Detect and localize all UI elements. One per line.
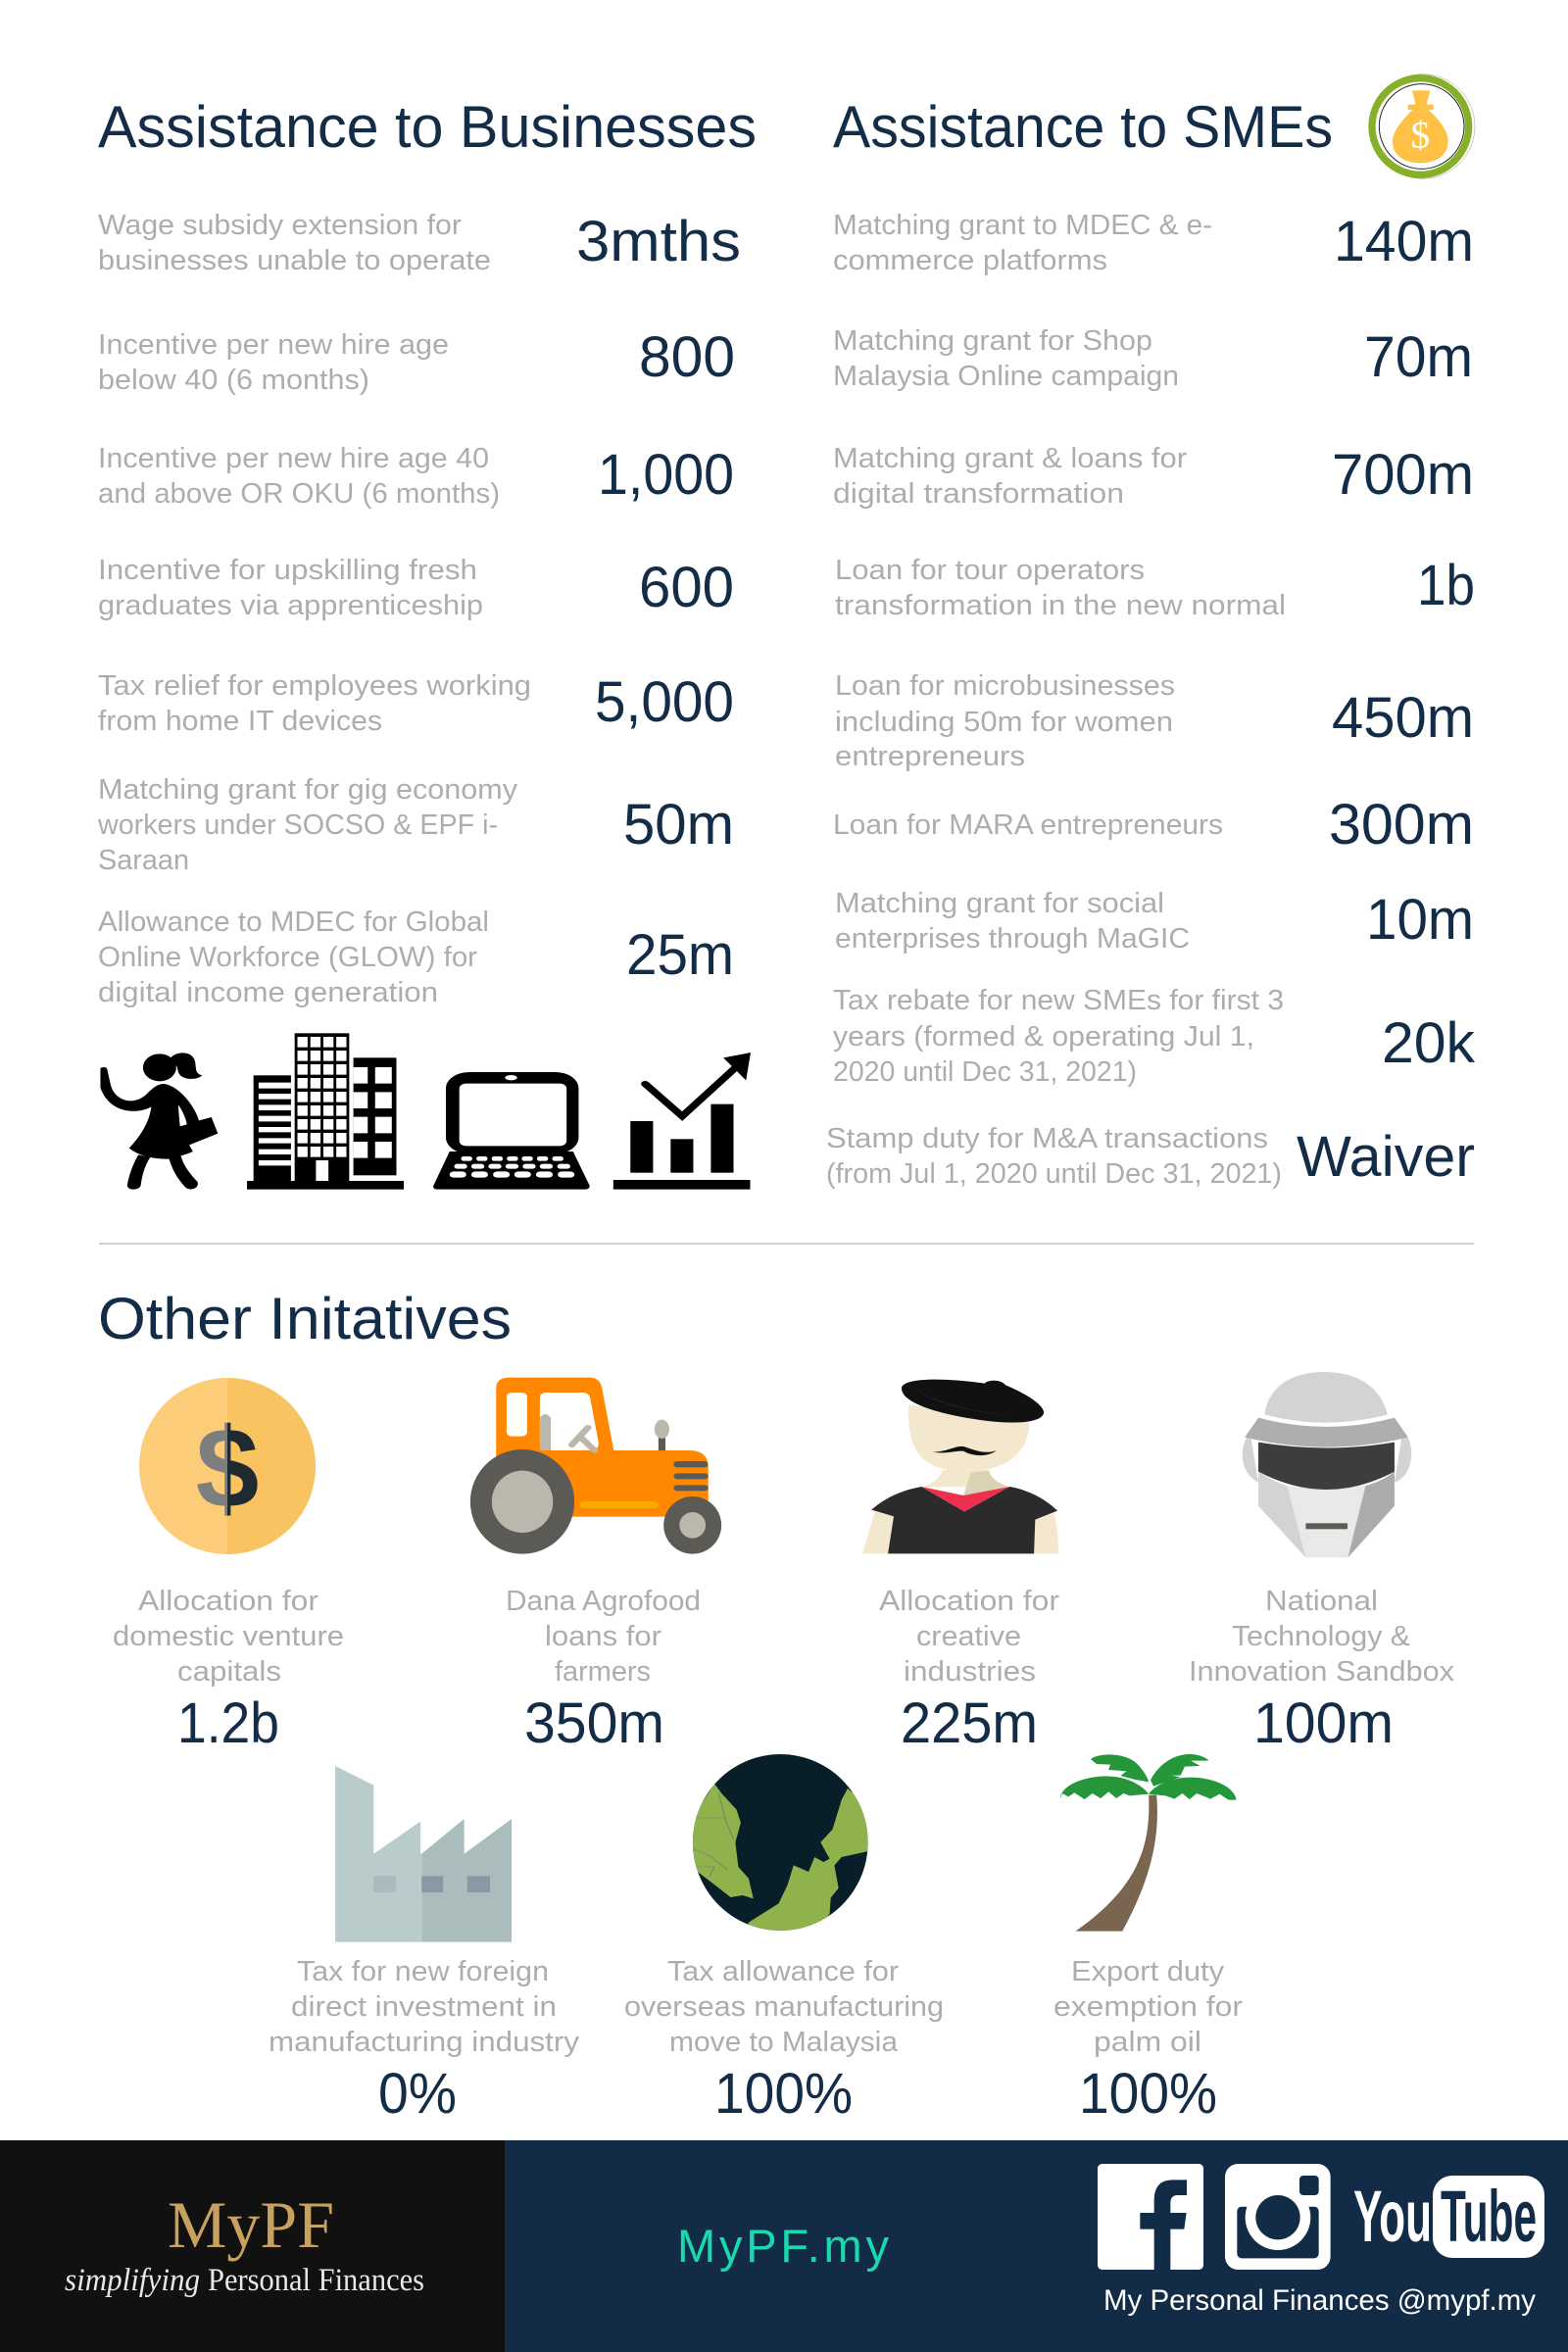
row: MARA entrepreneurs: Loan for MARA entrepreneurs <box>833 809 1223 841</box>
row: tax rebate: Tax rebate for new SMEs for first 3 <box>833 985 1284 1016</box>
icon: businesswoman <box>100 1053 218 1190</box>
icon: facebook <box>1098 2164 1203 2270</box>
item: agrofood loans: Dana Agrofood <box>506 1586 701 1617</box>
item: overseas manufacturing: overseas manufacturing <box>624 1991 944 2023</box>
icon row: business pictograms <box>100 1033 751 1190</box>
item: technology sandbox: National <box>1265 1586 1378 1617</box>
logo panel: MyPF: MyPF <box>168 2187 334 2262</box>
item: foreign direct investment: direct investment in <box>291 1991 557 2023</box>
logo panel: MyPF: simplifying <box>65 2263 200 2298</box>
row: tour operators: 1b <box>1417 554 1475 617</box>
icon: factory <box>335 1766 512 1942</box>
row: MDEC e-commerce: commerce platforms <box>833 245 1107 276</box>
heading: assistance to businesses: Assistance to Businesses <box>98 94 757 160</box>
row: social enterprises: Matching grant for social <box>835 888 1164 919</box>
logo panel: MyPF <box>0 2140 505 2352</box>
heading: assistance to SMEs: Assistance to SMEs <box>833 94 1333 160</box>
row: stamp duty: Waiver <box>1297 1125 1475 1189</box>
row: Shop Malaysia Online: Matching grant for Shop <box>833 325 1152 357</box>
item: foreign direct investment: Tax for new foreign <box>297 1956 549 1987</box>
row: MARA entrepreneurs: 300m <box>1329 793 1474 857</box>
row: tour operators: Loan for tour operators <box>835 555 1145 586</box>
row: microbusinesses: Loan for microbusinesses <box>835 670 1175 702</box>
row: Shop Malaysia Online <box>833 325 1473 392</box>
row: digital transformation: Matching grant & loans for <box>833 443 1187 474</box>
row: MDEC e-commerce: Matching grant to MDEC & e- <box>833 210 1212 241</box>
row: GLOW allowance: 25m <box>626 923 734 987</box>
row: tax rebate: 2020 until Dec 31, 2021) <box>833 1056 1137 1088</box>
row: tax relief: from home IT devices <box>98 706 382 737</box>
item: domestic venture capitals: 1.2b <box>177 1691 279 1755</box>
item: technology sandbox: Innovation Sandbox <box>1189 1656 1455 1688</box>
row: tour operators: transformation in the new normal <box>835 590 1286 621</box>
item: technology sandbox <box>1189 1372 1455 1755</box>
row: gig economy <box>97 774 734 876</box>
item: palm oil <box>1054 1754 1243 2126</box>
row: social enterprises: enterprises through MaGIC <box>835 923 1190 955</box>
row: Shop Malaysia Online: 70m <box>1364 325 1473 389</box>
item: foreign direct investment: manufacturing industry <box>269 2027 580 2058</box>
row: hire 40 and above: 1,000 <box>598 443 734 507</box>
icon: money bag badge <box>1370 74 1475 178</box>
row: tax rebate <box>833 985 1476 1088</box>
row: tour operators <box>835 554 1475 621</box>
row: tax rebate: years (formed & operating Jul 1, <box>833 1021 1254 1053</box>
row: social enterprises <box>835 888 1474 955</box>
row: hire below 40 <box>98 325 735 396</box>
item: creative industries: 225m <box>901 1691 1038 1755</box>
item: palm oil: 100% <box>1079 2062 1217 2126</box>
row: MDEC e-commerce: 140m <box>1334 210 1474 273</box>
icon: growth chart <box>613 1053 751 1190</box>
item: palm oil: Export duty <box>1071 1956 1225 1987</box>
row: stamp duty <box>826 1123 1475 1190</box>
item: overseas manufacturing: 100% <box>714 2062 853 2126</box>
item: agrofood loans <box>470 1378 721 1755</box>
row: upskilling: graduates via apprenticeship <box>98 590 483 621</box>
item: domestic venture capitals: Allocation for <box>138 1586 318 1617</box>
item: overseas manufacturing <box>624 1754 944 2126</box>
social handle: My Personal Finances @mypf.my <box>1103 2284 1536 2317</box>
row: Shop Malaysia Online: Malaysia Online campaign <box>833 361 1179 392</box>
row: tax relief <box>98 670 734 737</box>
heading: other initiatives: Other Initatives <box>98 1286 512 1351</box>
row: hire below 40: below 40 (6 months) <box>98 365 369 396</box>
row: gig economy: 50m <box>623 793 734 857</box>
row: stamp duty: Stamp duty for M&A transactions <box>826 1123 1268 1154</box>
item: foreign direct investment <box>269 1766 580 2126</box>
row: stamp duty: (from Jul 1, 2020 until Dec 31, 2021) <box>826 1158 1282 1190</box>
row: wage subsidy: Wage subsidy extension for <box>98 210 462 241</box>
icon: dollar coin <box>139 1378 316 1554</box>
row: hire below 40: Incentive per new hire age <box>98 329 449 361</box>
row: GLOW allowance <box>98 906 734 1008</box>
row: upskilling: 600 <box>639 556 734 619</box>
icon: laptop <box>433 1072 590 1190</box>
item: technology sandbox: 100m <box>1253 1691 1394 1755</box>
panel: other initiatives <box>98 1286 1455 2126</box>
item: agrofood loans: 350m <box>524 1691 664 1755</box>
item: creative industries: Allocation for <box>879 1586 1059 1617</box>
row: microbusinesses: including 50m for women <box>835 707 1173 738</box>
item: agrofood loans: loans for <box>545 1621 662 1652</box>
item: domestic venture capitals: capitals <box>177 1656 281 1688</box>
footer background: navy <box>505 2140 1568 2352</box>
row: tax relief: Tax relief for employees working <box>98 670 531 702</box>
website: MyPF.my: MyPF.my <box>677 2220 890 2272</box>
icon: palm tree <box>1060 1754 1237 1932</box>
icon: youtube <box>1353 2176 1544 2258</box>
row: hire 40 and above <box>98 443 734 510</box>
row: tax rebate: 20k <box>1382 1011 1476 1075</box>
row: upskilling: Incentive for upskilling fresh <box>98 555 477 586</box>
row: gig economy: workers under SOCSO & EPF i- <box>97 809 498 841</box>
item: domestic venture capitals <box>113 1378 344 1755</box>
row: wage subsidy: businesses unable to operate <box>98 245 491 276</box>
row: hire 40 and above: Incentive per new hire age 40 <box>98 443 489 474</box>
row: wage subsidy <box>98 210 741 276</box>
icon: youtube: You <box>1353 2176 1432 2257</box>
item: creative industries <box>862 1380 1059 1755</box>
row: microbusinesses <box>835 670 1474 772</box>
row: tax relief: 5,000 <box>595 670 734 734</box>
footer <box>0 2140 1568 2352</box>
item: palm oil: exemption for <box>1054 1991 1243 2023</box>
icon: money bag badge: $ <box>1410 114 1430 157</box>
panel: assistance to businesses <box>97 94 757 1190</box>
row: social enterprises: 10m <box>1366 888 1474 952</box>
icon: tractor <box>470 1378 721 1554</box>
icon: dollar coin: $ <box>196 1404 259 1532</box>
row: digital transformation <box>833 443 1474 510</box>
row: GLOW allowance: digital income generation <box>98 977 438 1008</box>
item: creative industries: creative <box>916 1621 1021 1652</box>
row: hire below 40: 800 <box>639 325 735 389</box>
icon: globe <box>686 1754 871 1934</box>
icon: instagram <box>1225 2164 1331 2270</box>
icon: dollar coin: $ <box>196 1404 259 1532</box>
icon: artist with beret <box>862 1380 1058 1553</box>
row: MDEC e-commerce <box>833 210 1474 276</box>
row: gig economy: Saraan <box>98 845 189 876</box>
item: palm oil: palm oil <box>1094 2027 1201 2058</box>
item: agrofood loans: farmers <box>555 1656 651 1688</box>
row: GLOW allowance: Allowance to MDEC for Global <box>98 906 489 938</box>
item: technology sandbox: Technology & <box>1232 1621 1410 1652</box>
icon: robot helmet <box>1243 1372 1411 1557</box>
row: hire 40 and above: and above OR OKU (6 months) <box>98 478 500 510</box>
row: upskilling <box>98 555 734 621</box>
item: domestic venture capitals: domestic venture <box>113 1621 344 1652</box>
row: GLOW allowance: Online Workforce (GLOW) for <box>98 942 477 973</box>
row: gig economy: Matching grant for gig economy <box>98 774 518 806</box>
item: foreign direct investment: 0% <box>378 2062 457 2126</box>
item: overseas manufacturing: Tax allowance for <box>667 1956 899 1987</box>
row: microbusinesses: entrepreneurs <box>835 741 1025 772</box>
icon: office buildings <box>247 1033 404 1190</box>
item: overseas manufacturing: move to Malaysia <box>669 2027 899 2058</box>
row: digital transformation: digital transformation <box>833 478 1124 510</box>
panel: assistance to SMEs <box>826 74 1476 1190</box>
logo panel: MyPF: Personal Finances <box>208 2263 424 2298</box>
row: wage subsidy: 3mths <box>576 210 741 273</box>
row: MARA entrepreneurs <box>833 793 1474 857</box>
row: digital transformation: 700m <box>1332 443 1474 507</box>
row: microbusinesses: 450m <box>1332 686 1474 750</box>
item: creative industries: industries <box>904 1656 1036 1688</box>
